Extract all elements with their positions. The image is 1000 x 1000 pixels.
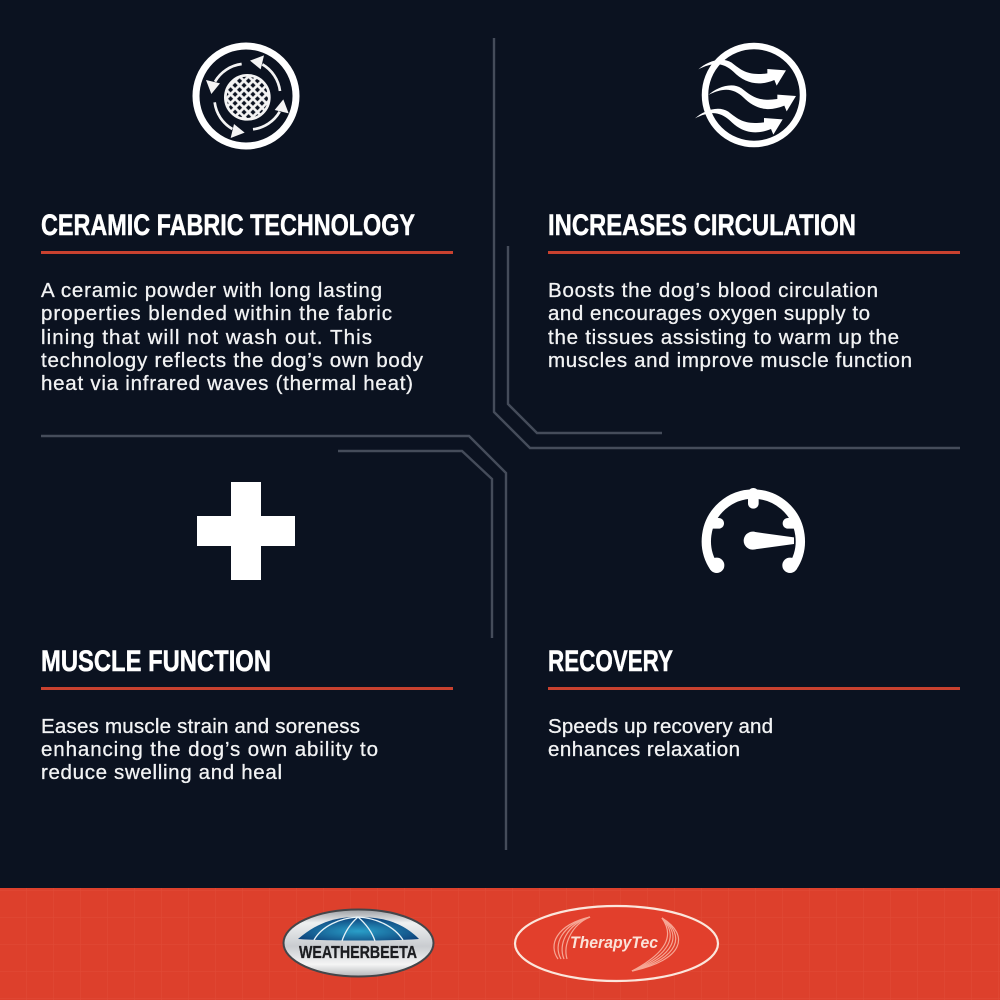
red rule bbox=[41, 687, 453, 690]
logo: Weatherbeeta: WEATHERBEETA bbox=[299, 942, 417, 962]
body text bbox=[41, 715, 378, 784]
body text: heat via infrared waves (thermal heat) bbox=[41, 372, 413, 395]
body text: enhancing the dog’s own ability to bbox=[41, 738, 378, 761]
panel: muscle function bbox=[41, 482, 453, 784]
panel: increases circulation bbox=[548, 46, 960, 372]
heading: MUSCLE FUNCTION bbox=[41, 645, 271, 678]
logo: TherapyTec: TherapyTec bbox=[570, 933, 659, 952]
body text: Speeds up recovery and bbox=[548, 715, 773, 738]
heading: RECOVERY bbox=[548, 645, 673, 678]
body text: enhances relaxation bbox=[548, 738, 740, 761]
body text: A ceramic powder with long lasting bbox=[41, 279, 382, 302]
body text bbox=[548, 279, 912, 372]
icon: ceramic mesh with rotating arrows bbox=[196, 46, 296, 146]
body text: Boosts the dog’s blood circulation bbox=[548, 279, 878, 302]
logo: TherapyTec bbox=[515, 906, 718, 981]
heading: CERAMIC FABRIC TECHNOLOGY bbox=[41, 209, 415, 242]
red rule bbox=[548, 687, 960, 690]
red rule bbox=[548, 251, 960, 254]
circuit divider: top right outer bbox=[494, 38, 960, 448]
body text: reduce swelling and heal bbox=[41, 761, 282, 784]
red rule bbox=[41, 251, 453, 254]
icon: plus bbox=[197, 482, 295, 580]
body text: technology reflects the dog’s own body bbox=[41, 349, 424, 372]
circuit divider: bottom left inner bbox=[338, 451, 492, 638]
body text: muscles and improve muscle function bbox=[548, 349, 912, 372]
body text: Eases muscle strain and soreness bbox=[41, 715, 360, 738]
heading: INCREASES CIRCULATION bbox=[548, 209, 856, 242]
body text: and encourages oxygen supply to bbox=[548, 302, 870, 325]
body text: properties blended within the fabric bbox=[41, 302, 392, 325]
logo: Weatherbeeta bbox=[284, 910, 434, 976]
icon: circulation waves bbox=[695, 46, 803, 144]
body text bbox=[548, 715, 773, 761]
panel: recovery bbox=[548, 493, 960, 761]
body text bbox=[41, 279, 424, 395]
footer band bbox=[0, 888, 1000, 1000]
body text: the tissues assisting to warm up the bbox=[548, 326, 899, 349]
panel: ceramic fabric technology bbox=[41, 46, 453, 395]
circuit divider: top right inner bbox=[508, 246, 662, 433]
circuit divider: bottom left outer bbox=[41, 436, 506, 850]
icon: speedometer bbox=[706, 493, 800, 573]
body text: lining that will not wash out. This bbox=[41, 326, 372, 349]
